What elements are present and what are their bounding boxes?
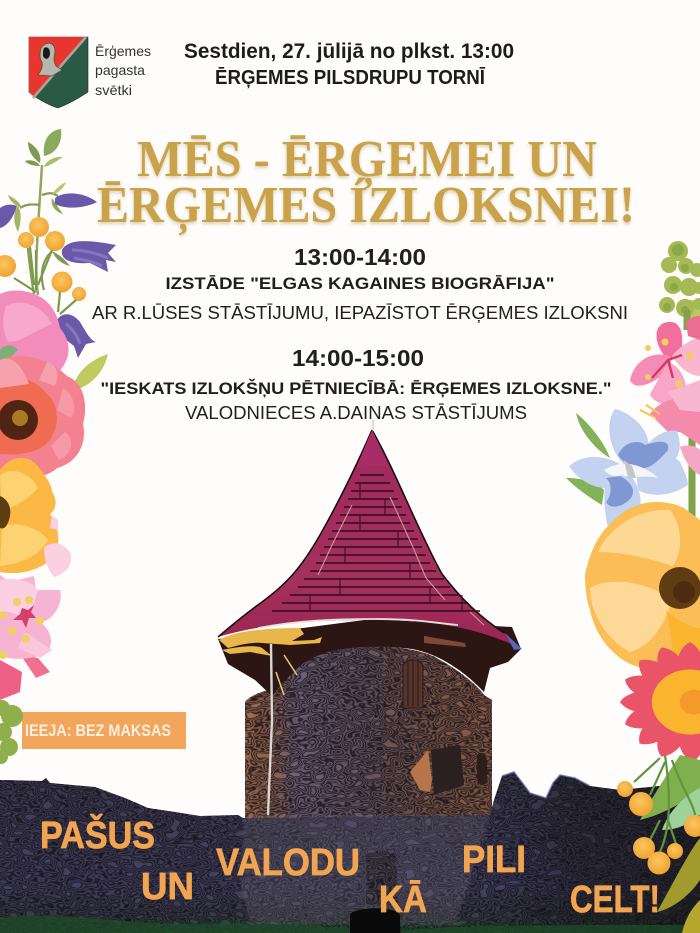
sprig stems and leaves [8, 129, 70, 295]
berry stems [634, 755, 696, 852]
purple bells [0, 193, 116, 358]
main title: MĒS - ĒRĢEMEI UN [137, 131, 597, 190]
yellow flower [0, 458, 58, 573]
wall top edge [502, 772, 590, 798]
lighter centre wall [240, 815, 490, 925]
wall shade [502, 772, 700, 933]
pink lily [630, 316, 700, 405]
stem [687, 310, 692, 518]
slogan: CELT! [570, 879, 660, 921]
gate opening [350, 908, 400, 933]
orange berries [617, 781, 700, 874]
roof edge band [258, 619, 458, 628]
tower eaves shadow [218, 619, 521, 696]
yellow-green leaf [72, 354, 108, 390]
castle wall [0, 772, 700, 933]
shield [29, 37, 88, 108]
main title [97, 131, 635, 236]
tower body [245, 646, 492, 830]
slogan [40, 812, 660, 921]
session two title: "IESKATS IZLOKŠŅU PĒTNIECĪBĀ: ĒRĢEMES IZLOKSNE." [100, 379, 612, 398]
gate column [366, 851, 397, 905]
top spire [372, 420, 374, 431]
pale pink petal [44, 515, 71, 577]
red daisy [620, 642, 700, 762]
slogan: PILI [462, 839, 526, 881]
eaves golden timbers [219, 628, 322, 648]
helmet [38, 43, 62, 76]
event date and place [184, 40, 514, 89]
entry badge: IEEJA: BEZ MAKSAS [25, 722, 171, 740]
blue flower [569, 409, 688, 528]
tower [218, 430, 522, 830]
session two time: 14:00-15:00 [292, 345, 424, 371]
event date and place: Sestdien, 27. jūlijā no plkst. 13:00 [184, 40, 514, 63]
main title: ĒRĢEMES ÍZLOKSNEI! [97, 176, 635, 236]
orange berries [0, 217, 86, 301]
slogan: VALODU [216, 842, 360, 884]
session two detail: VALODNIECES A.DAINAS STĀSTĪJUMS [185, 403, 527, 423]
green buds over badge [0, 700, 23, 764]
green leaves behind blue flower [566, 413, 610, 505]
session one title: IZSTĀDE "ELGAS KAGAINES BIOGRĀFIJA" [166, 274, 554, 293]
slogan: KĀ [379, 879, 427, 921]
entry badge [22, 712, 186, 749]
logo text [95, 43, 151, 98]
programme [92, 244, 628, 423]
session one time: 13:00-14:00 [294, 244, 426, 270]
grass [0, 916, 700, 933]
second pink blossom [640, 380, 700, 475]
coral flower [0, 356, 85, 478]
left floral column [0, 129, 116, 700]
slogan: PAŠUS [40, 812, 155, 857]
berry stems [14, 247, 76, 314]
wall stones [0, 772, 700, 933]
tower roof [218, 430, 520, 648]
event date and place: ĒRĢEMES PILSDRUPU TORNĪ [215, 67, 485, 89]
logo text: svētki [95, 82, 132, 98]
pink flower [0, 291, 69, 384]
tower breach [410, 750, 432, 792]
slogan: UN [141, 866, 194, 908]
tower window [403, 660, 423, 708]
logo text: pagasta [95, 62, 145, 78]
bell highlights [66, 250, 108, 344]
lower leaves [640, 755, 700, 933]
logo [29, 37, 151, 108]
green bud spike [659, 241, 700, 318]
right floral column [566, 241, 700, 933]
big yellow flower [585, 502, 700, 668]
session one detail: AR R.LŪSES STĀSTĪJUMU, IEPAZĪSTOT ĒRĢEMES IZLOKSNI [92, 303, 628, 323]
blossom cluster [0, 575, 61, 700]
logo text: Ērģemes [95, 43, 151, 59]
